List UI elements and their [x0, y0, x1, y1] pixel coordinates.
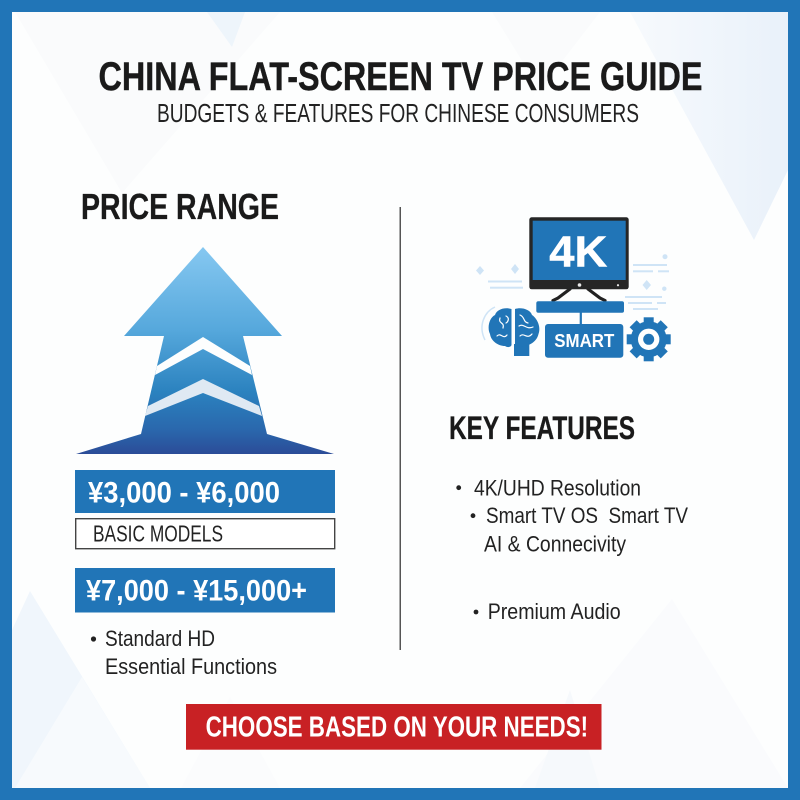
smart box	[545, 324, 623, 358]
callout: choose based on your needs	[186, 704, 602, 750]
label box: basic models: BASIC MODELS	[93, 520, 223, 546]
label box: basic models	[76, 519, 335, 549]
soundbar	[536, 301, 624, 313]
subtitle: BUDGETS & FEATURES FOR CHINESE CONSUMERS	[157, 100, 639, 128]
icon: gear	[627, 317, 671, 361]
list: basic features: Essential Functions	[105, 654, 277, 679]
list: key features: AI & Connecivity	[484, 532, 626, 557]
list: key features: 4K/UHD Resolution	[474, 475, 641, 500]
list: key features: Smart TV OS Smart TV	[486, 503, 688, 528]
heading: key features: KEY FEATURES	[449, 410, 635, 446]
callout: choose based on your needs: CHOOSE BASED ON YOUR NEEDS!	[206, 712, 588, 744]
price band: premium price: ¥7,000 - ¥15,000+	[86, 574, 307, 608]
price band: basic price	[75, 470, 335, 513]
tv label 4K: 4K	[549, 228, 608, 277]
tv screen	[533, 221, 626, 280]
icon: rising price arrow	[76, 247, 334, 454]
list: basic features: Standard HD	[105, 626, 215, 651]
icon: 4K smart TV illustration	[476, 217, 671, 361]
connector	[580, 312, 582, 325]
price band: basic price: ¥3,000 - ¥6,000	[88, 476, 280, 510]
smart label: SMART	[554, 331, 614, 351]
tv buttons	[578, 283, 619, 287]
divider line	[400, 207, 401, 650]
sparkles and data lines	[476, 254, 669, 310]
list: key features: Premium Audio	[488, 599, 621, 624]
heading: price range: PRICE RANGE	[81, 186, 279, 227]
list: basic features	[91, 626, 277, 679]
list: key features	[456, 475, 688, 624]
tv stand	[553, 289, 605, 300]
price band: premium price	[75, 568, 335, 612]
tv body	[529, 217, 629, 289]
icon: brain	[482, 307, 539, 356]
